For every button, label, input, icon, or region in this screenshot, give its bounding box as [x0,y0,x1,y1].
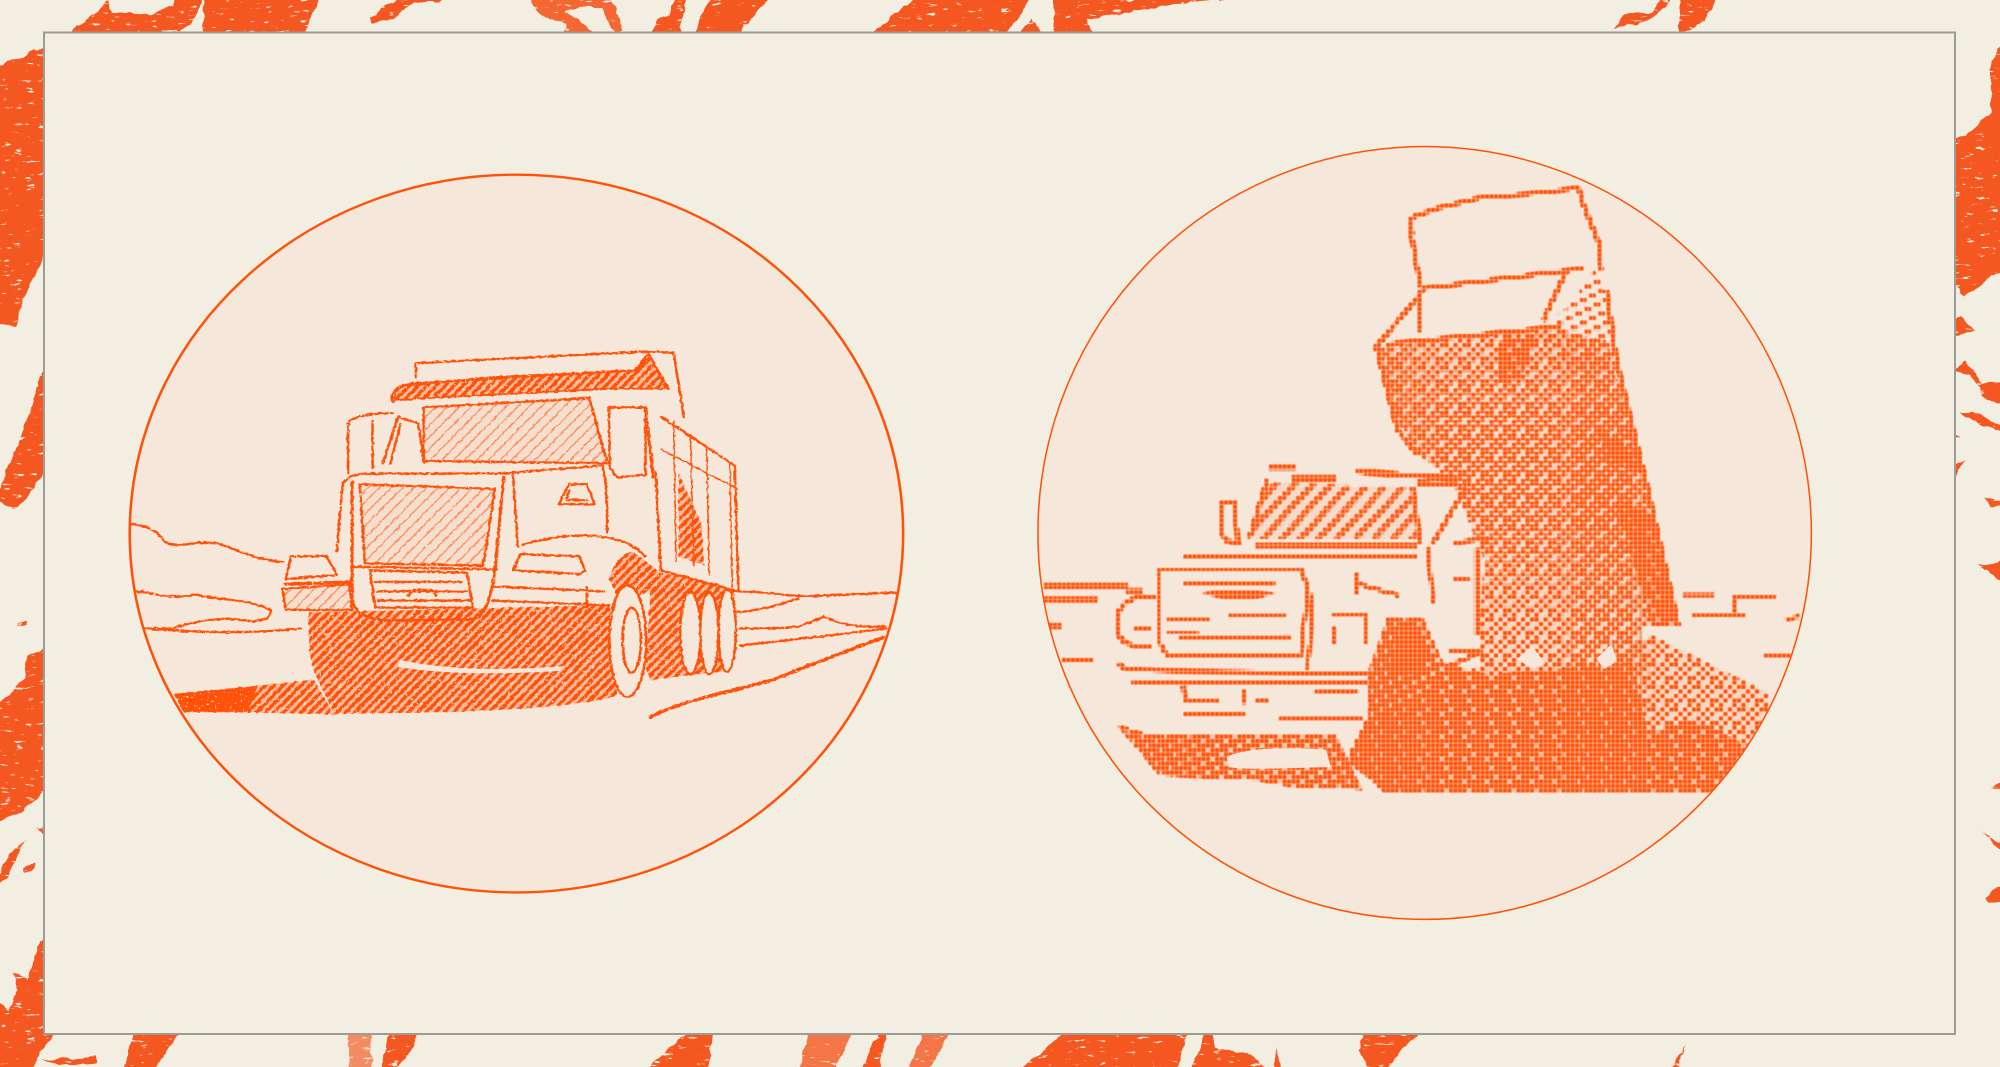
left truck sketch [131,352,896,717]
wheel shadow [1117,724,1362,790]
bumper [282,584,352,610]
dump body top [416,352,684,417]
left circle background [130,175,903,892]
fender [523,535,646,556]
chassis shadow [609,552,735,601]
raised bed outline [1374,188,1601,349]
right circle background [1038,147,1811,919]
dumped pile [1346,636,1770,794]
landscape lines [131,524,896,717]
wheels [609,585,736,697]
dump body side [656,417,738,591]
left edge strokes [0,46,46,1067]
mirrors [348,413,393,473]
right circle: dump truck tipping its load [1038,147,1811,919]
top edge strokes [69,0,1717,34]
cab side and badge [513,466,607,533]
road gap under truck [398,660,564,673]
left circle: dump truck driving [130,175,903,892]
horizon lines [1043,586,1142,660]
road shadow [174,605,617,715]
bumper lines [1119,664,1367,717]
windshield [424,398,607,463]
grille and headlights [1160,568,1308,656]
right edge strokes [1953,37,2000,905]
hood and grille [337,473,518,552]
headlights [286,556,337,580]
right circle outline [1038,147,1811,919]
lower grille [370,570,473,608]
bottom edge strokes [0,1000,1686,1067]
bed load [1540,266,1617,382]
right truck pixel sketch [1043,188,1800,794]
pale gaps in the pile and shadow [1226,644,1617,769]
truck cab [1249,483,1418,538]
